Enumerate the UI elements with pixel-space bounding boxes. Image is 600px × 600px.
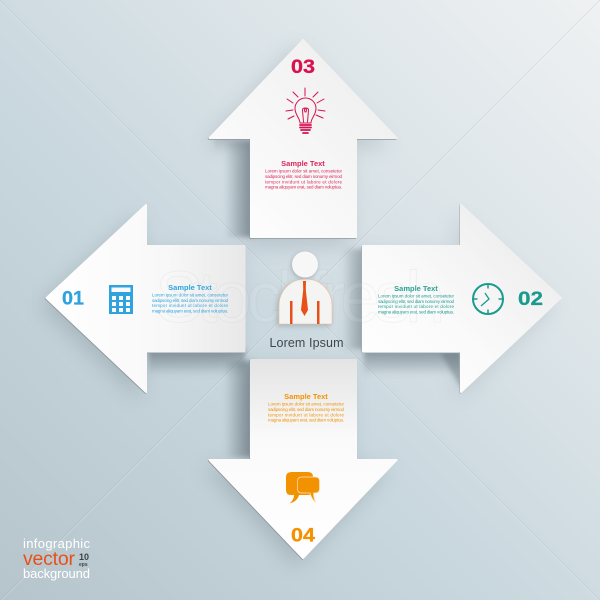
text block 01: Lorem ipsum dolor sit amet, consetetur [152, 292, 228, 298]
text block 02: Sample Text [394, 284, 438, 293]
icon: speech bubbles [286, 472, 320, 504]
text block 01: Sample Text [168, 283, 212, 292]
head [292, 252, 318, 278]
text block 01 [152, 283, 228, 314]
tie [301, 281, 308, 316]
arrow 03: up [209, 40, 396, 238]
text block 04: sadipscing elitr, sed diam nonumy eirmod [268, 407, 344, 412]
logo: infographic vector background: vector [23, 548, 76, 570]
number 02: 02 [518, 288, 543, 310]
arrow 01: left [46, 205, 244, 393]
text block 04 [268, 392, 344, 423]
logo: infographic vector background: 10 [79, 552, 89, 562]
logo: infographic vector background: eps [79, 562, 88, 568]
text block 04: Lorem ipsum dolor sit amet, consetetur [268, 402, 344, 406]
text block 04: tempor invidunt ut labore et dolore [268, 412, 344, 417]
text block 03: sadipscing elitr, sed diam nonumy eirmod [265, 174, 342, 179]
text block 02: Lorem ipsum dolor sit amet, consetetur [378, 294, 454, 298]
text block 04: Sample Text [284, 392, 328, 401]
number 01: 01 [62, 288, 84, 310]
arrow 02: right [362, 205, 561, 393]
logo: infographic vector background [23, 536, 90, 581]
text block 02: tempor invidunt ut labore et dolore [378, 304, 454, 309]
text block 01: sadipscing elitr, sed diam nonumy eirmod [152, 298, 228, 303]
text block 03 [265, 159, 342, 190]
text block 04: magna aliquyam erat, sed diam voluptua. [268, 418, 344, 423]
text block 02: sadipscing elitr, sed diam nonumy eirmod [378, 299, 454, 304]
text block 03: tempor invidunt ut labore et dolore [265, 179, 342, 184]
text block 01: tempor invidunt ut labore et dolore [152, 303, 228, 308]
logo: infographic vector background: infographic [23, 536, 90, 551]
text block 02: magna aliquyam erat, sed diam voluptua. [378, 310, 454, 314]
icon: light bulb [286, 88, 325, 133]
text block 02 [378, 284, 454, 314]
number 04: 04 [291, 524, 315, 546]
icon: calculator [109, 285, 133, 314]
text block 03: Sample Text [281, 159, 325, 168]
arrow 04: down [209, 360, 396, 559]
body [279, 279, 332, 324]
text block 01: magna aliquyam erat, sed diam voluptua. [152, 308, 228, 314]
arrow shadows [40, 45, 556, 567]
suspenders [290, 301, 320, 324]
watermark: Stockfresh [155, 258, 445, 338]
logo: infographic vector background: background [23, 566, 90, 581]
text block 03: Lorem ipsum dolor sit amet, consetetur [265, 168, 342, 174]
icon: clock [473, 284, 503, 314]
number 03: 03 [291, 56, 315, 78]
person icon [277, 252, 332, 326]
text block 03: magna aliquyam erat, sed diam voluptua. [265, 185, 342, 190]
label: Lorem Ipsum: Lorem Ipsum [270, 336, 344, 350]
